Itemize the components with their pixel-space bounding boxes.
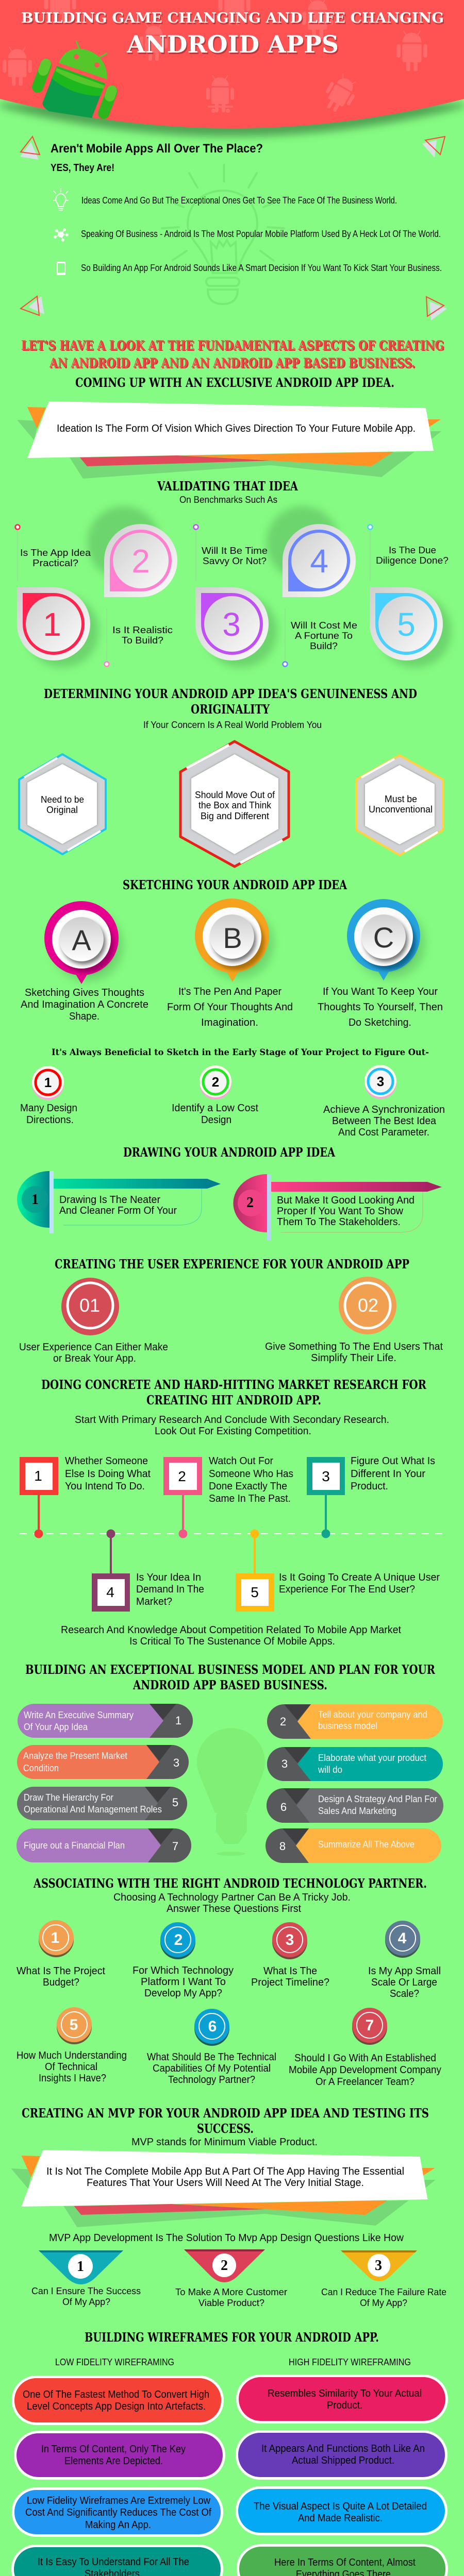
text: ideas: Ideas Come And Go But The Exceptional Ones Get To See The Face Of The Business World. bbox=[81, 195, 397, 206]
pill 6: 6 bbox=[280, 1801, 287, 1814]
funnel 1: 1 bbox=[77, 2259, 84, 2275]
hexagon: think big: the Box and Think bbox=[198, 800, 272, 810]
text: cost bbox=[291, 620, 357, 651]
pill 5: 5 bbox=[172, 1796, 178, 1809]
question 1: 1 bbox=[51, 1929, 59, 1946]
label: low fidelity: LOW FIDELITY WIREFRAMING bbox=[55, 2357, 174, 2367]
pill 7 bbox=[16, 1828, 191, 1862]
pill 6: Sales And Marketing bbox=[318, 1806, 396, 1816]
pill 1: Write An Executive Summary bbox=[24, 1710, 134, 1720]
node 2 bbox=[163, 1455, 293, 1538]
pill 3 right: will do bbox=[318, 1765, 342, 1775]
pill 1 bbox=[18, 1704, 193, 1738]
pill 1: 1 bbox=[175, 1714, 181, 1727]
item 1 teardrop: 1 bbox=[43, 606, 61, 643]
low 4 bbox=[12, 2546, 222, 2576]
high 4 bbox=[238, 2545, 446, 2576]
question 5 bbox=[16, 2007, 127, 2084]
ribbon: MVP definition bbox=[11, 2150, 435, 2227]
heading: sketching: SKETCHING YOUR ANDROID APP IDEA bbox=[123, 877, 347, 892]
funnel 1: Can I Ensure The Success bbox=[31, 2286, 141, 2296]
subheading: MVP stands for: MVP stands for Minimum Viable Product. bbox=[131, 2137, 318, 2148]
pill 6: Design A Strategy And Plan For bbox=[318, 1794, 437, 1804]
panel: hexagons bbox=[19, 741, 443, 867]
item 2 teardrop: 2 bbox=[131, 543, 150, 580]
question 5: 5 bbox=[70, 2016, 78, 2033]
high 2: It Appears And Functions Both Like An bbox=[261, 2443, 425, 2454]
node 2: Same In The Past. bbox=[209, 1493, 291, 1504]
step 2: 2 bbox=[246, 1195, 254, 1211]
text: practical: Is The App Idea bbox=[20, 548, 91, 558]
hexagon: original: Need to be bbox=[41, 794, 84, 805]
high 2: Actual Shipped Product. bbox=[292, 2455, 394, 2466]
step 2 bbox=[233, 1174, 442, 1241]
text: synchronization: Between The Best Idea bbox=[332, 1115, 437, 1127]
pill 3 right bbox=[267, 1747, 443, 1781]
high 3: The Visual Aspect Is Quite A Lot Detailed bbox=[254, 2501, 427, 2512]
heading: business model bbox=[25, 1662, 436, 1692]
funnel 1: Of My App? bbox=[62, 2297, 110, 2307]
subheading: real world problem: If Your Concern Is A Real World Problem You bbox=[143, 720, 322, 730]
question 4: Scale Or Large bbox=[371, 1977, 437, 1988]
subheading: research: Start With Primary Research And Conclude With Secondary Research. bbox=[75, 1414, 389, 1426]
text: realistic: To Build? bbox=[122, 635, 163, 646]
node 5 bbox=[236, 1529, 440, 1612]
text: simplify: Give Something To The End Users That bbox=[265, 1341, 443, 1352]
text: synchronization: And Cost Parameter. bbox=[338, 1127, 429, 1138]
subheading: yes they are: YES, They Are! bbox=[51, 162, 114, 174]
question 2 bbox=[132, 1922, 234, 1999]
hexagon: unconventional bbox=[356, 755, 443, 855]
pin A bbox=[44, 901, 124, 984]
text: low cost bbox=[172, 1103, 258, 1126]
text: time savvy bbox=[202, 546, 268, 566]
item 4 teardrop bbox=[266, 506, 356, 597]
text: practical: Practical? bbox=[32, 558, 78, 568]
funnel 1 bbox=[31, 2250, 141, 2307]
high 1: Resembles Similarity To Your Actual bbox=[268, 2388, 422, 2399]
icon: bulb watermark bbox=[162, 165, 284, 304]
pill 5: Draw The Hierarchy For bbox=[24, 1792, 113, 1803]
title: BUILDING GAME CHANGING AND LIFE CHANGING bbox=[21, 10, 444, 26]
text: C: If You Want To Keep Your bbox=[323, 986, 438, 997]
text: simplify bbox=[265, 1341, 443, 1364]
icon: android robot bbox=[38, 41, 112, 118]
text: realistic: Is It Realistic bbox=[112, 625, 173, 635]
funnel 2: Viable Product? bbox=[198, 2298, 264, 2308]
ribbon: ideation bbox=[17, 401, 441, 479]
subheading: always beneficial: It's Always Beneficial to Sketch in the Early Stage of Your Project to Figure Out- bbox=[52, 1047, 429, 1058]
node 2: Someone Who Has bbox=[209, 1468, 293, 1480]
ribbon: MVP definition: Features That Your Users Will Need At The Very Initial Stage. bbox=[87, 2177, 364, 2189]
high 4: Here In Terms Of Content, Almost bbox=[274, 2557, 416, 2568]
text: B bbox=[167, 986, 293, 1028]
hexagon: unconventional: Must be bbox=[385, 794, 417, 804]
question 3 bbox=[251, 1922, 329, 1988]
text: competition knowledge bbox=[61, 1624, 401, 1647]
high 1: Product. bbox=[327, 2400, 362, 2411]
high 1 bbox=[237, 2376, 446, 2422]
hexagon: think big bbox=[180, 741, 289, 867]
step 1: And Cleaner Form Of Your bbox=[59, 1205, 177, 1216]
node 3: Product. bbox=[351, 1481, 388, 1492]
low 2: Elements Are Depicted. bbox=[64, 2455, 163, 2467]
question 7 bbox=[289, 2008, 441, 2088]
node 3: Different In Your bbox=[351, 1468, 425, 1480]
funnel 3 bbox=[321, 2250, 446, 2308]
question 6 bbox=[147, 2009, 276, 2086]
pill 2: 2 bbox=[280, 1715, 286, 1728]
text: realistic bbox=[112, 625, 173, 646]
text: diligence: Is The Due bbox=[389, 545, 436, 555]
badge 01 bbox=[61, 1278, 119, 1335]
low 1: One Of The Fastest Method To Convert High bbox=[23, 2389, 209, 2400]
badge 02 bbox=[339, 1277, 396, 1334]
decoration: corner triangles bbox=[20, 137, 447, 320]
node 4: Market? bbox=[136, 1596, 172, 1607]
hexagon: unconventional: Unconventional bbox=[369, 804, 433, 815]
text: C: Do Sketching. bbox=[349, 1017, 411, 1028]
node 3 bbox=[307, 1455, 435, 1538]
subheading: tricky job: Answer These Questions First bbox=[167, 1903, 301, 1914]
question 3: What Is The bbox=[263, 1965, 317, 1977]
badge 1: 1 bbox=[44, 1075, 52, 1090]
header banner bbox=[0, 0, 464, 137]
item 5 teardrop: 5 bbox=[397, 606, 416, 643]
panel: wireframe comparison bbox=[12, 2376, 448, 2576]
step 1: Drawing Is The Neater bbox=[59, 1194, 160, 1206]
funnel 3: Can I Reduce The Failure Rate bbox=[321, 2287, 446, 2297]
heading: market research bbox=[41, 1377, 427, 1408]
text: cost: A Fortune To bbox=[295, 631, 353, 641]
badge 01: 01 bbox=[79, 1295, 100, 1316]
text: A bbox=[21, 987, 148, 1022]
funnel 2 bbox=[175, 2249, 287, 2308]
low 3: Cost And Significantly Reduces The Cost Of bbox=[25, 2507, 211, 2518]
question 2: For Which Technology bbox=[132, 1965, 234, 1976]
badge 2: 2 bbox=[212, 1074, 219, 1090]
high 2 bbox=[237, 2432, 446, 2478]
subheading: benchmarks: On Benchmarks Such As bbox=[179, 495, 277, 505]
question 4: Is My App Small bbox=[368, 1965, 441, 1977]
text: C bbox=[318, 986, 443, 1028]
text: diligence: Diligence Done? bbox=[376, 555, 449, 566]
badge 02: 02 bbox=[358, 1295, 378, 1316]
funnel 3: Of My App? bbox=[360, 2298, 407, 2308]
node 4 bbox=[92, 1529, 204, 1612]
badge 1 bbox=[32, 1066, 64, 1100]
badge 2 bbox=[200, 1065, 231, 1099]
text: make or break: or Break Your App. bbox=[53, 1353, 136, 1364]
pill 3 left: Condition bbox=[23, 1763, 59, 1773]
text: simplify: Simplify Their Life. bbox=[311, 1352, 396, 1364]
question 4: Scale? bbox=[390, 1988, 419, 1999]
node 2: Done Exactly The bbox=[209, 1481, 287, 1492]
text: time savvy: Savvy Or Not? bbox=[203, 556, 267, 566]
subheading: research bbox=[75, 1414, 389, 1437]
question 5: Of Technical bbox=[45, 2061, 97, 2073]
pill 6 bbox=[267, 1788, 443, 1823]
item 4 teardrop: 4 bbox=[310, 543, 328, 580]
question 2: Develop My App? bbox=[144, 1988, 222, 1999]
node 1: Whether Someone bbox=[65, 1455, 148, 1467]
ribbon: ideation: Ideation Is The Form Of Vision Which Gives Direction To Your Future Mobile App. bbox=[57, 423, 416, 434]
text: competition knowledge: Research And Knowledge About Competition Related To Mobile App Market bbox=[61, 1624, 401, 1636]
text: C: Thoughts To Yourself, Then bbox=[318, 1002, 443, 1013]
low 3: Making An App. bbox=[85, 2519, 151, 2531]
node 5: Is It Going To Create A Unique User bbox=[279, 1572, 440, 1583]
heading: genuineness bbox=[44, 686, 417, 717]
question 4 bbox=[368, 1921, 441, 1999]
badge 3 bbox=[364, 1065, 396, 1099]
heading: MVP bbox=[22, 2106, 429, 2136]
heading: market research: CREATING HIT ANDROID APP. bbox=[146, 1393, 321, 1408]
hexagon: original: Original bbox=[46, 805, 78, 815]
heading: exclusive idea: COMING UP WITH AN EXCLUSIVE ANDROID APP IDEA. bbox=[75, 375, 394, 390]
title: ANDROID APPS bbox=[126, 30, 339, 58]
high 3: And Made Realistic. bbox=[298, 2513, 383, 2524]
hexagon: original bbox=[19, 754, 106, 854]
item 5 teardrop bbox=[370, 587, 452, 668]
question 1 bbox=[16, 1920, 105, 1988]
hexagon: think big: Should Move Out of bbox=[195, 790, 275, 800]
pill 3 right: Elaborate what your product bbox=[318, 1753, 426, 1763]
high 3 bbox=[237, 2487, 446, 2534]
node 1: 1 bbox=[34, 1468, 42, 1484]
node 4: 4 bbox=[106, 1584, 114, 1600]
pin A: A bbox=[72, 924, 91, 956]
heading: MVP: SUCCESS. bbox=[197, 2121, 254, 2136]
panel: benchmark teardrops bbox=[15, 506, 452, 668]
panel: intro bbox=[20, 137, 447, 320]
low 3: Low Fidelity Wireframes Are Extremely Low bbox=[27, 2495, 211, 2506]
text: directions: Many Design bbox=[20, 1103, 77, 1114]
pill 7: Figure out a Financial Plan bbox=[24, 1840, 125, 1851]
question 5: Insights I Have? bbox=[39, 2073, 106, 2084]
pill 3 left: Analyze the Present Market bbox=[23, 1751, 127, 1761]
pill 2 bbox=[267, 1704, 443, 1739]
node 3: Figure Out What Is bbox=[351, 1455, 435, 1467]
text: cost: Build? bbox=[310, 641, 338, 651]
question 5: How Much Understanding bbox=[16, 2050, 127, 2061]
icon: phone bbox=[57, 262, 65, 275]
pin C: C bbox=[373, 921, 394, 954]
subheading: tricky job: Choosing A Technology Partner Can Be A Tricky Job. bbox=[113, 1892, 351, 1903]
question 4: 4 bbox=[398, 1930, 407, 1947]
question 3: Project Timeline? bbox=[251, 1977, 329, 1988]
text: make or break: User Experience Can Either Make bbox=[19, 1342, 168, 1353]
node 4: Demand In The bbox=[136, 1584, 204, 1595]
pill 3 left: 3 bbox=[173, 1756, 179, 1769]
text: diligence bbox=[376, 545, 449, 566]
text: A: Sketching Gives Thoughts bbox=[25, 987, 144, 998]
heading: intro question: Aren't Mobile Apps All Over The Place? bbox=[51, 142, 263, 156]
pill 2: business model bbox=[318, 1721, 377, 1731]
item 3 teardrop bbox=[195, 587, 277, 668]
question 7: 7 bbox=[366, 2017, 374, 2034]
question 6: Technology Partner? bbox=[168, 2074, 255, 2086]
pill 3 left bbox=[17, 1745, 189, 1779]
text: time savvy: Will It Be Time bbox=[202, 546, 268, 556]
text: A: Shape. bbox=[69, 1011, 100, 1022]
step 1: 1 bbox=[31, 1192, 39, 1208]
text: synchronization bbox=[323, 1104, 445, 1138]
pin B bbox=[195, 899, 274, 982]
icon: light bulb bbox=[54, 189, 68, 210]
question 1: What Is The Project bbox=[16, 1965, 105, 1977]
item 1 teardrop bbox=[17, 587, 99, 668]
text: cost: Will It Cost Me bbox=[291, 620, 357, 631]
question 6: What Should Be The Technical bbox=[147, 2052, 276, 2063]
text: B: It's The Pen And Paper bbox=[178, 986, 281, 997]
panel: partner questions bbox=[16, 1920, 441, 2088]
node 1: You Intend To Do. bbox=[65, 1481, 145, 1492]
question 7: Should I Go With An Established bbox=[294, 2053, 436, 2064]
pill 2: Tell about your company and bbox=[318, 1709, 427, 1720]
subheading: tricky job bbox=[113, 1892, 351, 1914]
text: synchronization: Achieve A Synchronization bbox=[323, 1104, 445, 1115]
node 3: 3 bbox=[322, 1468, 330, 1484]
timeline: market research bbox=[20, 1455, 445, 1612]
panel: business plan pills bbox=[16, 1704, 443, 1863]
node 2: Watch Out For bbox=[209, 1455, 273, 1467]
node 5: 5 bbox=[251, 1584, 259, 1600]
low 4: It Is Easy To Understand For All The bbox=[38, 2556, 189, 2568]
ribbon: MVP definition: It Is Not The Complete Mobile App But A Part Of The App Having The Essential bbox=[46, 2166, 404, 2177]
icon: network bbox=[54, 229, 68, 241]
badge 3: 3 bbox=[377, 1074, 384, 1089]
heading: validating: VALIDATING THAT IDEA bbox=[157, 479, 298, 494]
pin B: B bbox=[223, 922, 242, 954]
pill 3 right: 3 bbox=[281, 1757, 288, 1770]
question 3: 3 bbox=[286, 1931, 294, 1948]
panel: user experience bbox=[19, 1277, 443, 1364]
title bbox=[21, 10, 444, 58]
node 1: Else Is Doing What bbox=[65, 1468, 151, 1480]
question 6: Capabilities Of My Potential bbox=[153, 2063, 271, 2074]
text: directions: Directions. bbox=[26, 1114, 74, 1126]
question 6: 6 bbox=[208, 2018, 217, 2035]
panel: sketching pins bbox=[21, 899, 443, 1028]
pill 8 bbox=[266, 1828, 441, 1863]
low 3 bbox=[13, 2488, 222, 2536]
node 1 bbox=[20, 1455, 151, 1538]
text: low cost: Identify a Low Cost bbox=[172, 1103, 258, 1114]
node 2: 2 bbox=[178, 1468, 186, 1484]
question 1: Budget? bbox=[43, 1977, 79, 1988]
text: B: Imagination. bbox=[201, 1017, 258, 1028]
pill 1: Of Your App Idea bbox=[24, 1722, 88, 1732]
step 1 bbox=[17, 1171, 221, 1233]
text: practical bbox=[20, 548, 91, 568]
step 2: Proper If You Want To Show bbox=[277, 1206, 404, 1217]
question 2: Platform I Want To bbox=[141, 1976, 226, 1988]
low 2: In Terms Of Content, Only The Key bbox=[41, 2444, 186, 2455]
low 1 bbox=[13, 2377, 223, 2424]
low 1: Level Concepts App Design Into Artefacts. bbox=[27, 2401, 206, 2412]
funnel 2: 2 bbox=[221, 2258, 228, 2274]
text: competition knowledge: Is Critical To The Sustenance Of Mobile Apps. bbox=[129, 1636, 335, 1647]
heading: fundamental aspects bbox=[21, 338, 444, 370]
text: MVP solution: MVP App Development Is The Solution To Mvp App Design Questions Like How bbox=[49, 2232, 404, 2244]
pill 8: 8 bbox=[279, 1840, 286, 1853]
label: high fidelity: HIGH FIDELITY WIREFRAMING bbox=[289, 2357, 411, 2367]
heading: drawing: DRAWING YOUR ANDROID APP IDEA bbox=[123, 1145, 335, 1160]
hexagon: think big: Big and Different bbox=[201, 811, 269, 821]
pill 5 bbox=[17, 1787, 187, 1820]
panel: MVP funnels bbox=[31, 2249, 446, 2308]
funnel 2: To Make A More Customer bbox=[175, 2287, 287, 2297]
pill 7: 7 bbox=[172, 1840, 178, 1853]
pill 8: Summarize All The Above bbox=[318, 1839, 415, 1850]
panel: drawing steps bbox=[17, 1171, 442, 1241]
pins bbox=[15, 524, 372, 667]
panel: sketch benefits bbox=[20, 1065, 445, 1138]
heading: wireframes: BUILDING WIREFRAMES FOR YOUR ANDROID APP. bbox=[85, 2330, 379, 2345]
item 2 teardrop bbox=[87, 506, 177, 597]
question 2: 2 bbox=[174, 1931, 183, 1948]
heading: genuineness: ORIGINALITY bbox=[191, 702, 270, 717]
text: low cost: Design bbox=[201, 1114, 231, 1126]
low 2 bbox=[15, 2432, 224, 2478]
text: directions bbox=[20, 1103, 77, 1126]
node 4: Is Your Idea In bbox=[136, 1572, 201, 1583]
step 2: Them To The Stakeholders. bbox=[277, 1216, 401, 1228]
question 7: Mobile App Development Company bbox=[289, 2064, 441, 2076]
node 5: Experience For The End User? bbox=[279, 1584, 415, 1595]
text: make or break bbox=[19, 1342, 168, 1364]
funnel 3: 3 bbox=[375, 2258, 382, 2274]
text: B: Form Of Your Thoughts And bbox=[167, 1002, 293, 1013]
subheading: research: Look Out For Existing Competition. bbox=[155, 1426, 311, 1437]
question 7: Or A Freelancer Team? bbox=[316, 2076, 415, 2088]
pill 5: Operational And Management Roles bbox=[24, 1804, 162, 1815]
step 2: But Make It Good Looking And bbox=[277, 1195, 415, 1206]
pin C bbox=[347, 899, 426, 980]
heading: business model: ANDROID APP BASED BUSINESS. bbox=[132, 1677, 327, 1692]
item 3 teardrop: 3 bbox=[222, 606, 241, 643]
icon: bulb watermark bbox=[197, 1728, 265, 1856]
text: A: And Imagination A Concrete bbox=[21, 999, 148, 1010]
